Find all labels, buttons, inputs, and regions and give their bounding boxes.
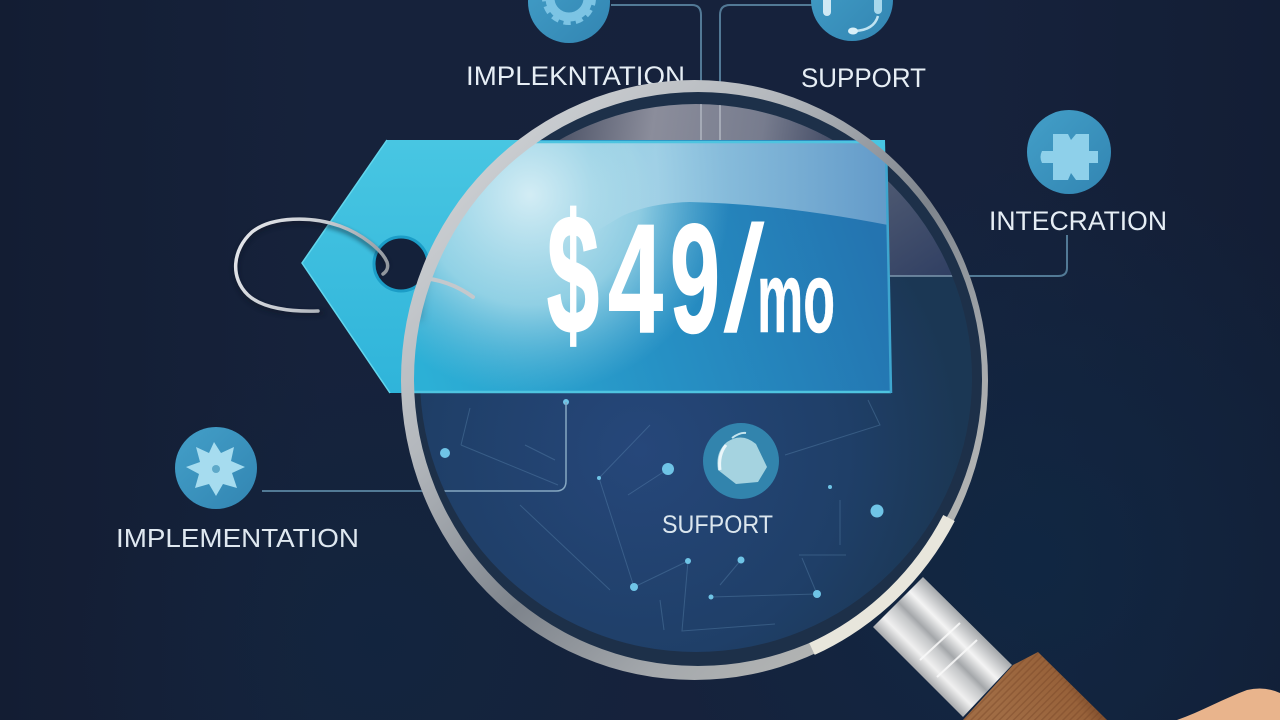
price text: mo (757, 242, 835, 354)
ferrule grooves (920, 623, 977, 677)
hand (1177, 689, 1280, 720)
tag top and bottom highlights (400, 142, 891, 393)
bright ring highlight near handle (812, 518, 949, 649)
magnifying glass lens (414, 92, 982, 666)
price text: 9 (670, 192, 720, 365)
connector line seen through lens (444, 402, 567, 492)
price tag body (302, 140, 891, 393)
wooden grip (963, 652, 1107, 720)
wire end in lens (418, 278, 473, 297)
lens glare, upper (560, 104, 832, 140)
lens tint, right of tag (888, 182, 952, 276)
wire loop (236, 219, 388, 313)
icon: star gear, lower implementation (175, 427, 257, 509)
dark inner shadow over tag, upper left (420, 286, 430, 322)
label: top implementation: IMPLEKNTATION (466, 61, 685, 91)
support icon in lens (703, 423, 779, 499)
label: top support: SUPPORT (801, 63, 926, 93)
icon: gear, top implementation (528, 0, 610, 43)
tag glare (400, 142, 888, 393)
label: lens support: SUFPORT (662, 511, 773, 539)
lens interior (420, 104, 972, 652)
tag seen through lens (387, 140, 891, 393)
lens chrome ring (401, 80, 988, 680)
connector lines (262, 5, 1067, 491)
price text: $ (547, 180, 599, 370)
connector through lens, right (890, 275, 952, 277)
tag eyelet hole (374, 237, 428, 291)
label: integration: INTECRATION (989, 206, 1167, 236)
magnifying glass handle (873, 577, 1107, 720)
connector lines through glass top (700, 104, 721, 140)
price text: / (725, 197, 764, 362)
price text: 4 (608, 192, 663, 365)
metal ferrule (873, 577, 1012, 717)
label: lower implementation: IMPLEMENTATION (116, 523, 359, 553)
dark lens rim (405, 84, 985, 676)
network pattern (440, 399, 884, 631)
icon: headset, top support (811, 0, 893, 41)
price text (547, 206, 834, 347)
icon: puzzle piece, integration (1027, 110, 1111, 194)
